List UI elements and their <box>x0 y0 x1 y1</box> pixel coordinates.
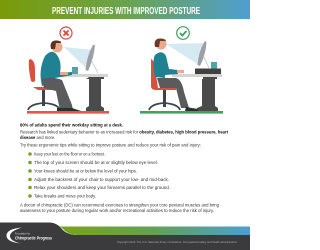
logo <box>6 228 52 244</box>
desk <box>172 74 222 111</box>
text block: closing <box>20 202 220 213</box>
illustration: correct posture <box>140 27 223 114</box>
tip 3: Your knees should be at or below the level of your hips. <box>34 168 137 174</box>
tip 6: Take breaks and move your body. <box>34 194 96 198</box>
tip 5: Relax your shoulders and keep your forearms parallel to the ground. <box>34 185 170 190</box>
gradient band <box>50 222 250 235</box>
tip 4: Adjust the backrest of your chair to support your low- and mid-back. <box>34 177 169 182</box>
chair <box>149 59 180 110</box>
text block: intro: 80% of adults spend their workday sitting at a desk. <box>20 122 123 128</box>
tip 2: The top of your screen should be at or slightly below eye level. <box>34 160 158 165</box>
text block: intro: Research has linked sedentary behavior to an increased risk for obesity, diabetes, high blood pressure, heart <box>20 130 229 134</box>
text block: closing: awareness to your posture during regular work and/or recreational activities to reduce the risk of injury. <box>20 208 214 213</box>
illustration: incorrect posture <box>27 27 109 114</box>
logo: Foundation for <box>15 232 30 236</box>
monitor <box>86 45 95 71</box>
icon: red X <box>60 27 72 39</box>
text block: intro <box>20 122 229 148</box>
copyright: Copyright 2019. The U.S. National Library of Medicine. Occupational safety and health administration <box>117 240 237 244</box>
mug <box>72 67 78 74</box>
logo: Chiropractic Progress <box>15 236 52 240</box>
icon: green check <box>177 27 189 39</box>
text block: intro: Try these ergonomic tips while sitting to improve posture and reduce your risk of pain and injury: <box>20 142 201 148</box>
mug <box>211 62 217 69</box>
chair <box>28 59 60 110</box>
person <box>41 40 81 111</box>
riser <box>195 68 221 74</box>
footer <box>0 222 250 250</box>
text block: intro: disease and more. <box>20 135 55 140</box>
text block: closing: A doctor of chiropractic (DC) can recommend exercises to strengthen your core postural muscles and bring <box>20 202 220 208</box>
infographic canvas <box>0 0 250 250</box>
floor <box>27 111 109 114</box>
floor <box>140 111 223 114</box>
monitor <box>198 41 206 66</box>
header banner <box>0 0 250 19</box>
desk <box>60 74 108 111</box>
gaze cone <box>166 43 206 65</box>
checklist <box>28 152 170 198</box>
tip 1: Keep your feet on the floor or on a footrest. <box>34 152 105 156</box>
gaze cone <box>64 47 93 70</box>
person <box>154 38 198 111</box>
